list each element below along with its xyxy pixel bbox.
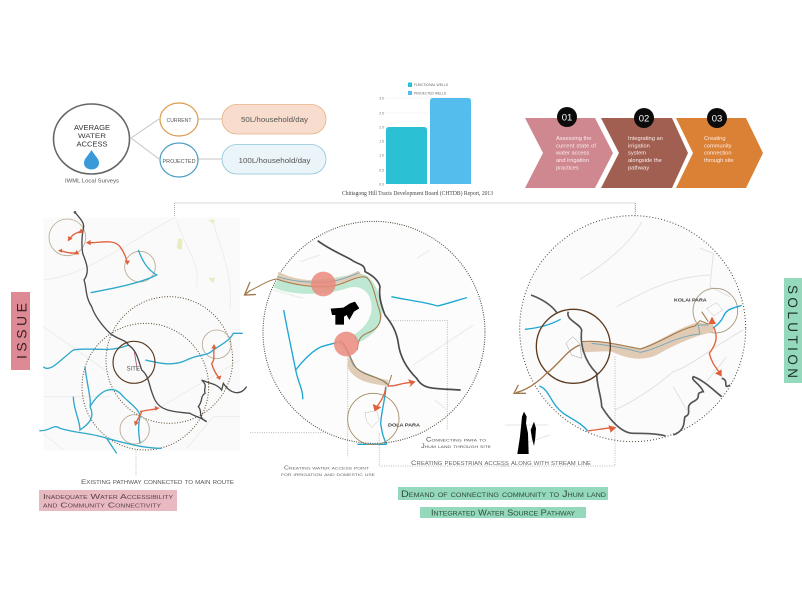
grid lines and axis labels [379,96,472,186]
icon: water drop [84,150,99,170]
icon: silhouette figures [331,302,359,325]
label: issue [11,292,30,370]
grid lines and axis labels: 1.0 [379,154,384,158]
panel: issue map [39,211,247,453]
step 01: and irrigation [556,158,589,164]
step 03 [676,108,763,188]
water access point: upper [311,272,336,296]
faint terrain [43,218,240,450]
green corridor [273,274,382,343]
step 03: Creating [704,136,726,142]
dark pathway [318,241,461,390]
step 01: Assessing the [556,136,591,142]
grid lines and axis labels: 0.0 [379,182,384,186]
bar chart [379,82,472,186]
caption: connecting para: Jhum land through site [421,444,491,450]
dotted boundary circle [263,221,485,443]
dotted frame lines [174,203,636,292]
chart source caption: Chittagong Hill Tracts Development Board (CHTDB) Report, 2013 [342,190,493,197]
grid lines and axis labels: 1.5 [379,140,384,144]
callout: demand of connecting community: Demand of connecting community to Jhum land [401,489,607,499]
average water access circle: WATER [78,133,106,140]
dola para ring [348,393,399,445]
projected circle: PROJECTED [162,159,196,165]
step 01 [525,107,613,188]
caption: creating water access point: for irrigation and domestic use [281,472,375,478]
bar: projected wells [430,98,471,184]
caption: connecting para: Connecting para to [426,438,486,444]
step 02: alongside the [628,158,662,164]
bar: functional wells [386,127,427,184]
step 03: 03 [712,114,722,124]
dotted boundary circle [520,216,746,442]
average water access circle: ACCESS [76,140,108,148]
faint terrain [580,222,743,410]
grid lines and axis labels: 2.5 [379,112,384,116]
panel: center map [250,221,510,466]
orange access arrows [59,232,219,424]
step 02: 02 [639,114,649,124]
dark pathway [531,295,730,436]
orange arrows [587,327,720,431]
step 02: pathway [628,166,649,172]
water access point: lower [334,332,359,356]
panel: average water access [54,103,326,184]
chart legend [408,82,449,96]
average water access circle [54,104,130,174]
label: dola para: DOLA PARA [388,422,420,428]
dotted leaders [250,321,510,466]
label: solution: SOLUTION [785,285,800,378]
current circle [160,103,198,136]
callout: inadequate water accessibility: Inadequate Water Accessibility [43,492,174,501]
grid lines and axis labels: 0.5 [379,168,384,172]
icon: walking women silhouettes [505,412,550,454]
chevron steps [525,107,763,188]
projected value pill: 100L/household/day [238,156,311,165]
orange arrows [376,382,413,408]
callout: demand of connecting community [398,487,608,500]
caption: creating water access point [281,466,375,478]
connector lines [131,119,222,159]
faint terrain [273,250,473,410]
callout: inadequate water accessibility: and Community Connectivity [43,500,162,510]
site circle and label [113,341,155,383]
caption: creating pedestrian access: Creating pedestrian access along with stream line [411,460,592,467]
source label: IWML Local Surveys [65,178,119,184]
callout: integrated water source pathway [420,507,586,518]
step 02: irrigation [628,144,650,150]
average water access circle: AVERAGE [74,123,110,132]
tan pathway band [582,323,713,359]
step 01: water access [555,150,589,156]
brown arrow to the left [244,282,256,295]
brown arrow [514,345,580,393]
step 01: 01 [562,112,572,124]
step 03: through site [704,158,734,164]
callout: integrated water source pathway: Integrated Water Source Pathway [431,508,575,518]
label: issue: ISSUE [14,303,30,359]
step 02: system [628,150,646,156]
water line [277,273,387,384]
step 01: current state of [556,144,596,150]
step 02 [601,108,688,188]
caption: existing pathway: Existing pathway connected to main route [81,479,235,486]
panel: right map [500,203,746,466]
current value pill [222,104,326,134]
projected circle [160,143,198,177]
grid lines and axis labels: 2.0 [379,126,384,130]
site circle and label: SITE [127,367,140,373]
site circle [536,309,610,383]
streams [39,250,243,453]
streams [284,297,467,444]
label: kolai para: KOLAI PARA [674,297,707,303]
chart legend: PROJECTED WELLS [414,92,447,96]
kolai para ring [693,288,738,333]
caption: connecting para [421,438,491,450]
callout: inadequate water accessibility [39,490,177,511]
current value pill: 50L/household/day [241,115,308,124]
step 03: community [704,144,732,150]
tan pathway band [277,271,388,386]
streams [525,305,742,431]
brown connector path [250,277,392,385]
step 02: Integrating an [628,136,663,142]
main pathway [75,212,247,422]
current circle: CURRENT [166,118,192,124]
step 01: practices [556,166,579,172]
projected value pill [222,144,326,174]
water line [592,325,708,352]
dotted leader [500,203,635,466]
grid lines and axis labels: 3.0 [379,96,384,100]
site rings [49,219,233,450]
step 03: connection [704,150,732,156]
caption: creating water access point: Creating water access point [284,466,370,472]
chart legend: FUNCTIONAL WELLS [414,83,449,87]
